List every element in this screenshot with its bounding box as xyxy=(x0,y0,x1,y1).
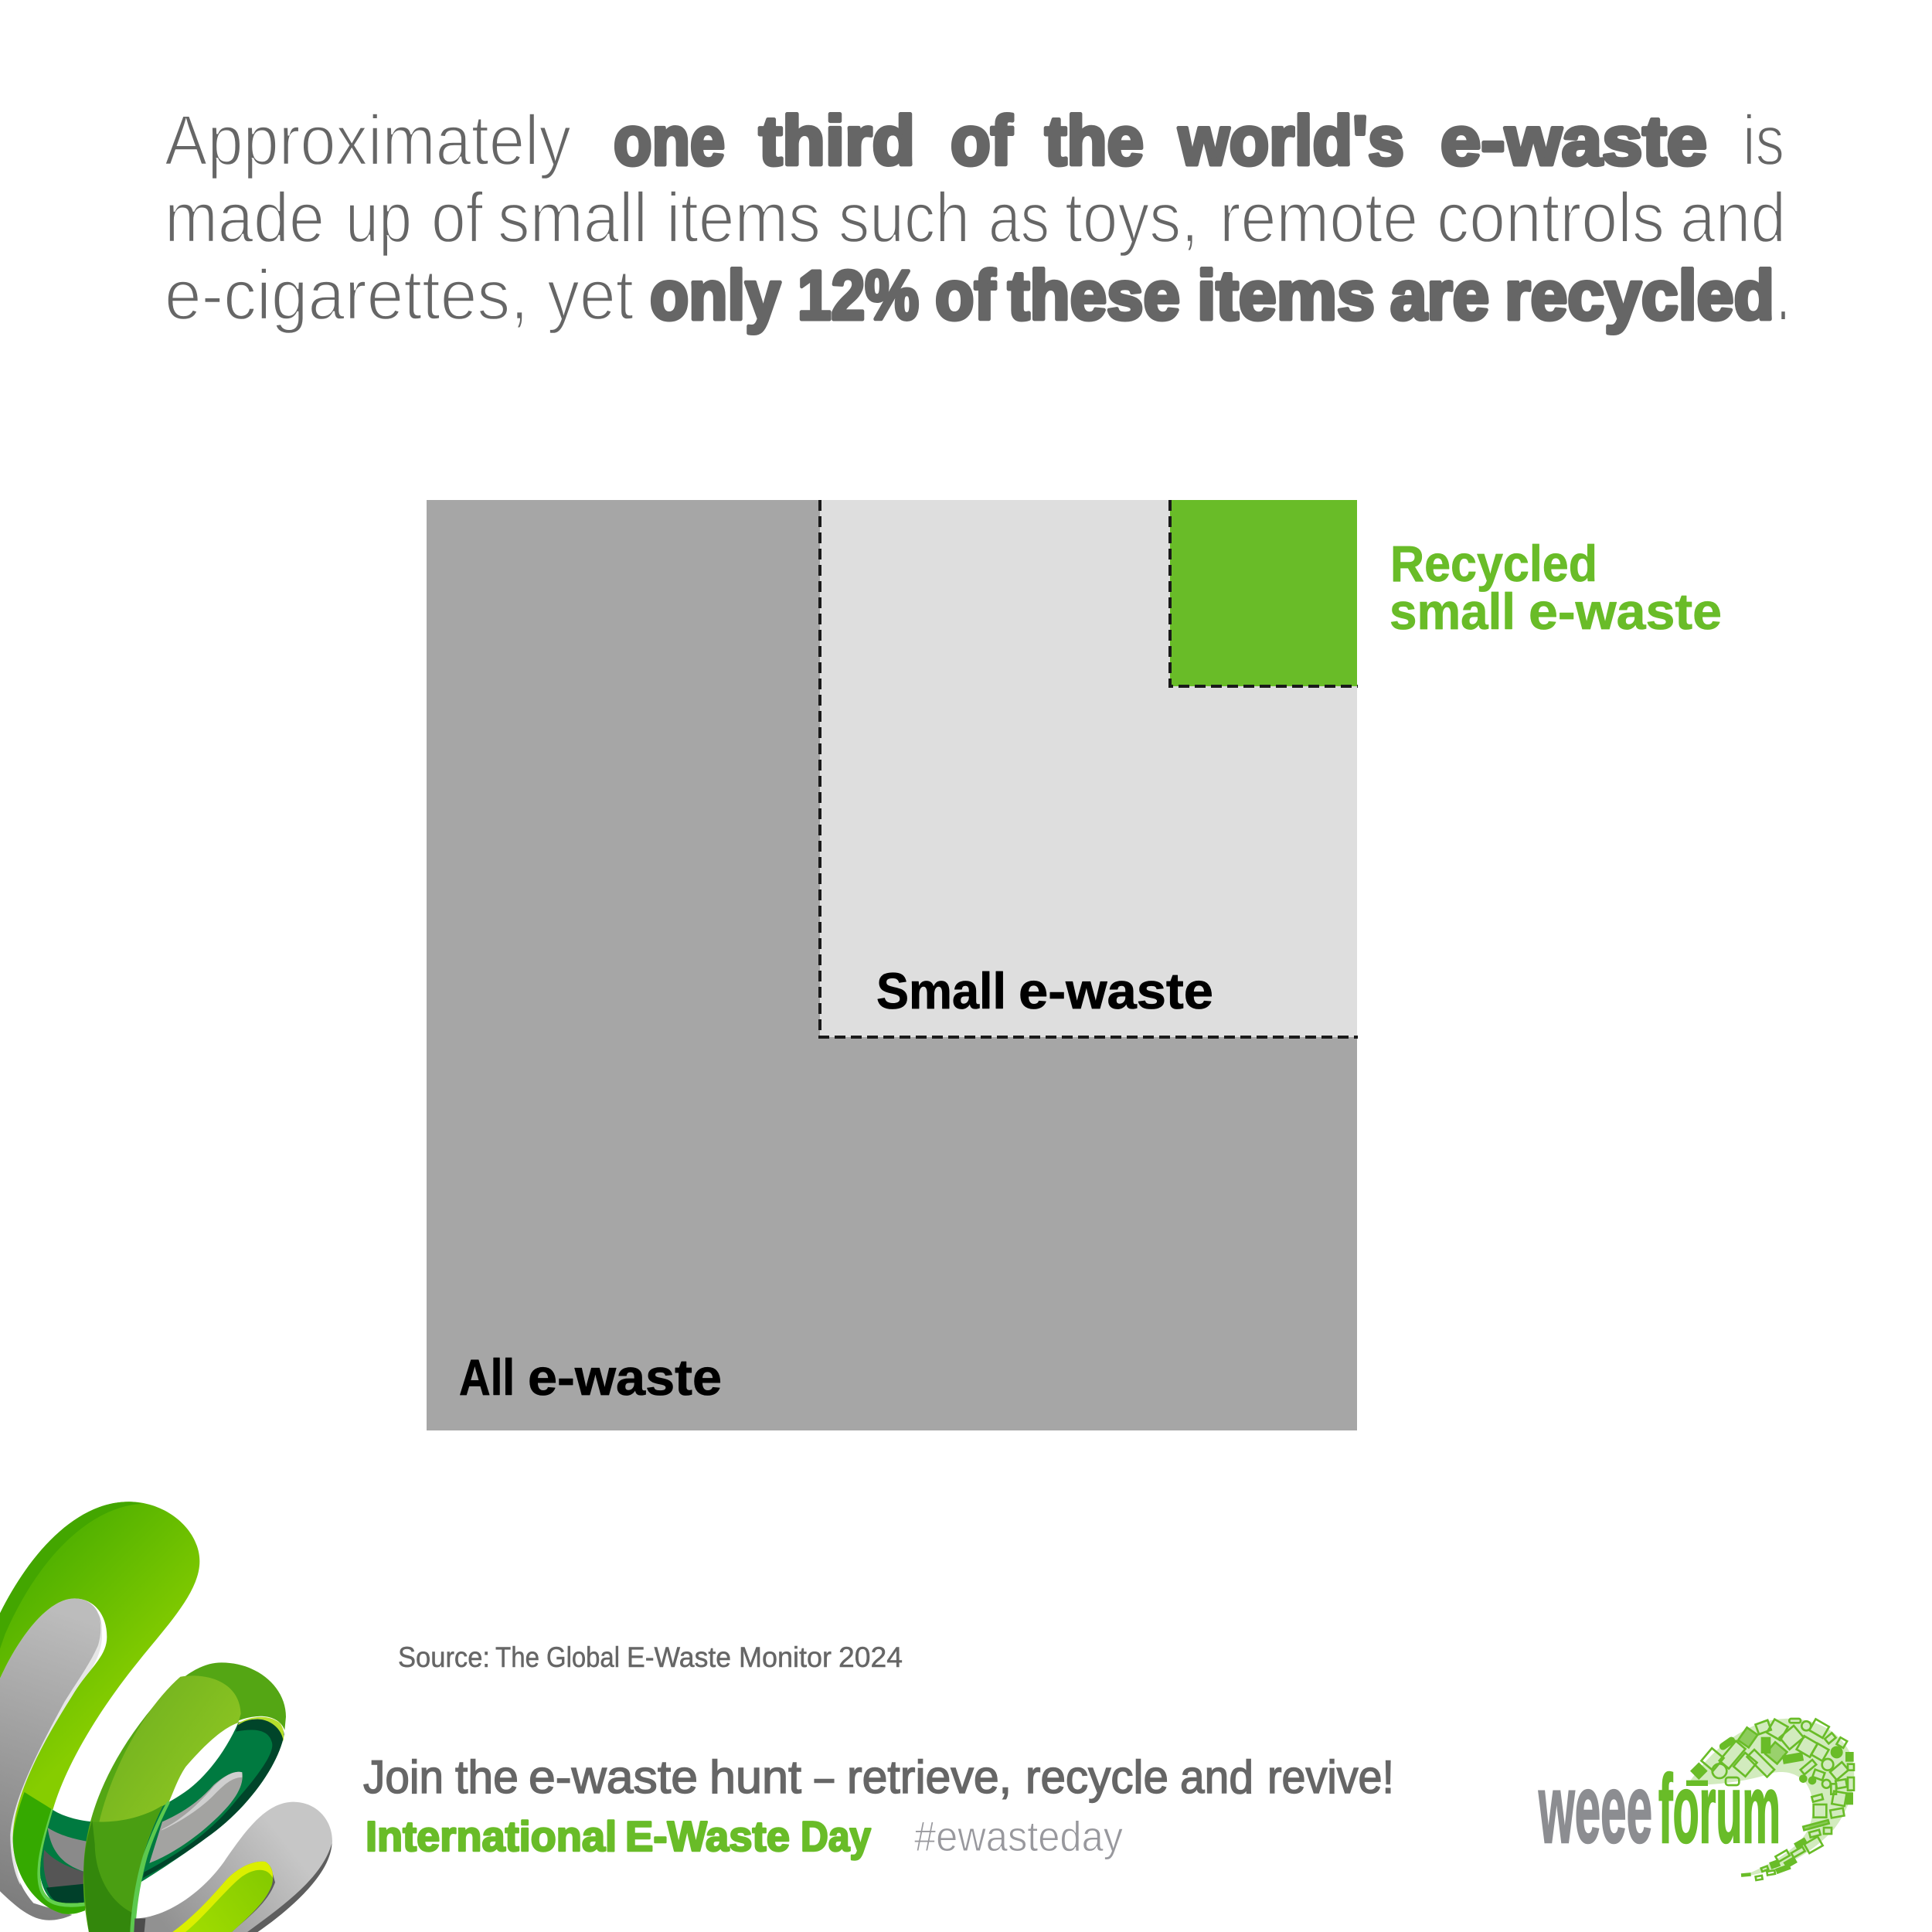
source note: E-Waste xyxy=(627,1641,731,1673)
headline line 2: such xyxy=(838,179,970,257)
square: small e-waste xyxy=(820,500,1357,1037)
square: all e-waste xyxy=(427,500,1357,1430)
headline line 1: one xyxy=(614,103,725,180)
headline line 1: Approximately xyxy=(165,101,571,180)
source note: 2024 xyxy=(838,1641,903,1673)
headline line 3: of xyxy=(935,257,996,335)
headline line 2: of xyxy=(431,179,483,257)
call to action: retrieve, xyxy=(847,1751,1012,1803)
label: small e-waste: e-waste xyxy=(1019,962,1213,1019)
headline line 2: small xyxy=(498,179,648,257)
international e-waste day xyxy=(366,1812,871,1860)
label: small e-waste xyxy=(876,962,1213,1019)
headline line 2: and xyxy=(1680,179,1786,257)
label: recycled small e-waste: Recycled xyxy=(1390,535,1597,592)
headline line 3: items xyxy=(1197,257,1375,335)
call to action: recycle xyxy=(1026,1751,1168,1803)
headline line 3: these xyxy=(1008,257,1180,335)
headline line 1: of xyxy=(951,103,1013,180)
headline line 3 xyxy=(165,256,1788,335)
headline line 1: the xyxy=(1045,103,1144,180)
source note: The xyxy=(495,1641,539,1673)
headline line 2: remote xyxy=(1219,179,1418,257)
source note xyxy=(398,1641,903,1673)
emblem: bottom grey ribbon xyxy=(134,1802,332,1932)
headline line 2: up xyxy=(345,179,412,257)
headline line 3: are xyxy=(1390,257,1489,335)
source note: Global xyxy=(546,1641,620,1673)
label: recycled small e-waste: e-waste xyxy=(1529,583,1722,640)
headline line 2: made xyxy=(165,179,325,257)
headline line 3: 12% xyxy=(798,257,919,335)
label: recycled small e-waste xyxy=(1389,535,1722,640)
label: all e-waste: e-waste xyxy=(528,1349,722,1406)
dashed outline: small e-waste xyxy=(820,500,1358,1037)
headline line 3: yet xyxy=(547,256,634,335)
call to action: – xyxy=(815,1751,834,1803)
headline xyxy=(165,101,1788,335)
logo swoosh of device icons xyxy=(1687,1719,1854,1880)
call to action: the xyxy=(455,1751,519,1803)
icon: e-waste day emblem xyxy=(0,1502,332,1932)
headline line 2: items xyxy=(666,179,821,257)
international e-waste day: Day xyxy=(801,1812,871,1860)
call to action: Join xyxy=(363,1751,444,1803)
international e-waste day: International xyxy=(366,1812,617,1860)
call to action xyxy=(363,1751,1394,1803)
emblem: front ring xyxy=(83,1662,286,1932)
hashtag: #ewasteday xyxy=(914,1812,1123,1860)
headline line 1: third xyxy=(759,103,915,180)
headline line 2 xyxy=(165,179,1786,257)
headline line 1: is xyxy=(1743,101,1784,180)
headline line 1: e-waste xyxy=(1440,103,1707,180)
headline line 3: e-cigarettes, xyxy=(165,256,529,335)
logo: weeeforum: forum xyxy=(1658,1756,1781,1863)
emblem: white highlight xyxy=(10,1611,102,1886)
call to action: and xyxy=(1180,1751,1253,1803)
headline line 2: as xyxy=(988,179,1049,257)
headline line 3: only xyxy=(650,257,781,335)
logo: weeeforum: weee xyxy=(1539,1756,1652,1863)
logo: weeeforum xyxy=(1539,1719,1854,1880)
source note: Source: xyxy=(398,1641,490,1673)
headline line 2: toys, xyxy=(1065,179,1199,257)
call to action: e-waste xyxy=(529,1751,698,1803)
call to action: revive! xyxy=(1267,1751,1394,1803)
headline line 1: world's xyxy=(1178,103,1404,180)
source note: Monitor xyxy=(739,1641,832,1673)
label: small e-waste: Small xyxy=(876,962,1006,1019)
label: all e-waste: All xyxy=(459,1349,515,1406)
emblem: grey ribbon xyxy=(0,1598,102,1920)
emblem: back ring xyxy=(39,1719,284,1906)
headline line 1 xyxy=(165,101,1784,180)
international e-waste day: E-Waste xyxy=(625,1812,790,1860)
label: recycled small e-waste: small xyxy=(1389,583,1515,640)
dashed outline: recycled xyxy=(1170,500,1358,686)
emblem: lime inset xyxy=(172,1862,273,1932)
headline line 3: recycled xyxy=(1505,257,1774,335)
headline line 2: controls xyxy=(1437,179,1665,257)
square: recycled small e-waste xyxy=(1170,500,1357,686)
nested squares chart xyxy=(427,500,1722,1430)
headline line 3: . xyxy=(1778,256,1788,335)
call to action: hunt xyxy=(709,1751,801,1803)
emblem: main green ribbon xyxy=(0,1502,199,1914)
